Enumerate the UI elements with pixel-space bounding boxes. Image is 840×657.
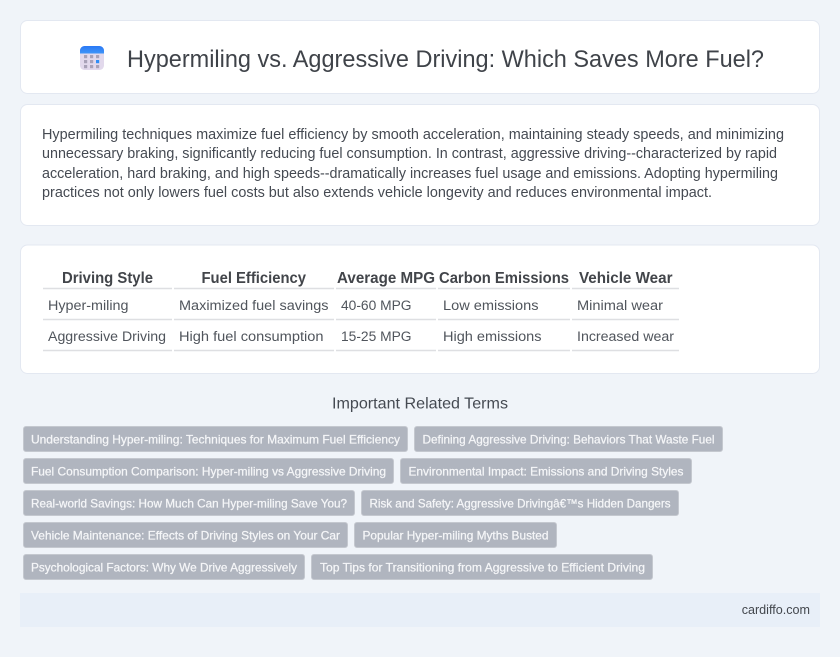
footer source text: cardiffo.com bbox=[742, 602, 810, 617]
table header row: Average MPG bbox=[337, 270, 435, 287]
table row: aggressive driving: High emissions bbox=[443, 329, 542, 345]
tag: Defining Aggressive Driving: Behaviors That Waste Fuel bbox=[422, 432, 714, 446]
tag: Fuel Consumption Comparison: Hyper-miling vs Aggressive Driving bbox=[31, 464, 386, 478]
text block: introduction paragraph: practices not only lowers fuel costs but also extends vehicle longevity and reduces environmental impact. bbox=[42, 185, 712, 201]
table row: aggressive driving: High fuel consumption bbox=[179, 329, 324, 345]
panel: related term tags bbox=[24, 426, 722, 580]
tag: Top Tips for Transitioning from Aggressive to Efficient Driving bbox=[320, 560, 645, 574]
tag: Environmental Impact: Emissions and Driving Styles bbox=[408, 464, 684, 478]
table header row: Vehicle Wear bbox=[579, 270, 672, 287]
tag: Psychological Factors: Why We Drive Aggressively bbox=[31, 560, 297, 574]
table header row: Driving Style bbox=[62, 270, 153, 287]
title: Hypermiling vs. Aggressive Driving: Which Saves More Fuel? bbox=[127, 46, 764, 73]
tag: Understanding Hyper-miling: Techniques for Maximum Fuel Efficiency bbox=[31, 432, 400, 446]
table row: aggressive driving bbox=[48, 329, 674, 345]
table row: hyper-miling: Low emissions bbox=[443, 298, 538, 314]
table header row bbox=[62, 270, 672, 287]
tag bbox=[362, 490, 678, 516]
text block: introduction paragraph bbox=[42, 127, 784, 201]
panel: title card bbox=[20, 20, 820, 94]
text block: introduction paragraph: Hypermiling techniques maximize fuel efficiency by smooth acceleration, maintaining steady speeds, and minimizing bbox=[42, 127, 784, 143]
tag bbox=[24, 426, 408, 452]
tag: Vehicle Maintenance: Effects of Driving Styles on Your Car bbox=[31, 528, 340, 542]
tag: Popular Hyper-miling Myths Busted bbox=[362, 528, 548, 542]
text block: introduction paragraph: acceleration, hard braking, and high speeds--dramatically increases fuel usage and emissions. Adopting hypermiling bbox=[42, 166, 778, 182]
icon: calendar bbox=[80, 46, 104, 70]
table row: aggressive driving: Increased wear bbox=[577, 329, 674, 345]
tag bbox=[312, 554, 652, 580]
text block: introduction paragraph: unnecessary braking, significantly reducing fuel consumption. In contrast, aggressive driving--characterized by rapid bbox=[42, 146, 777, 162]
table row: hyper-miling: Minimal wear bbox=[577, 298, 663, 314]
table row: aggressive driving: 15-25 MPG bbox=[341, 329, 412, 345]
table row: hyper-miling: Maximized fuel savings bbox=[179, 298, 328, 314]
tag bbox=[414, 426, 722, 452]
tag bbox=[354, 522, 556, 548]
footer bbox=[20, 593, 820, 627]
table header row: Fuel Efficiency bbox=[202, 270, 306, 287]
tag bbox=[24, 458, 394, 484]
tag bbox=[400, 458, 692, 484]
table row: hyper-miling: 40-60 MPG bbox=[341, 298, 412, 314]
table row: hyper-miling bbox=[48, 298, 663, 314]
tag: Risk and Safety: Aggressive Drivingâ€™s Hidden Dangers bbox=[370, 496, 670, 510]
table row: aggressive driving: Aggressive Driving bbox=[48, 329, 166, 345]
tag bbox=[24, 490, 354, 516]
tag bbox=[24, 522, 348, 548]
table row: hyper-miling: Hyper-miling bbox=[48, 298, 128, 314]
panel: introduction bbox=[20, 104, 820, 226]
tag bbox=[24, 554, 304, 580]
heading: related terms: Important Related Terms bbox=[332, 396, 508, 412]
panel: comparison table bbox=[20, 245, 820, 374]
table header row: Carbon Emissions bbox=[439, 270, 569, 287]
tag: Real-world Savings: How Much Can Hyper-miling Save You? bbox=[31, 496, 347, 510]
